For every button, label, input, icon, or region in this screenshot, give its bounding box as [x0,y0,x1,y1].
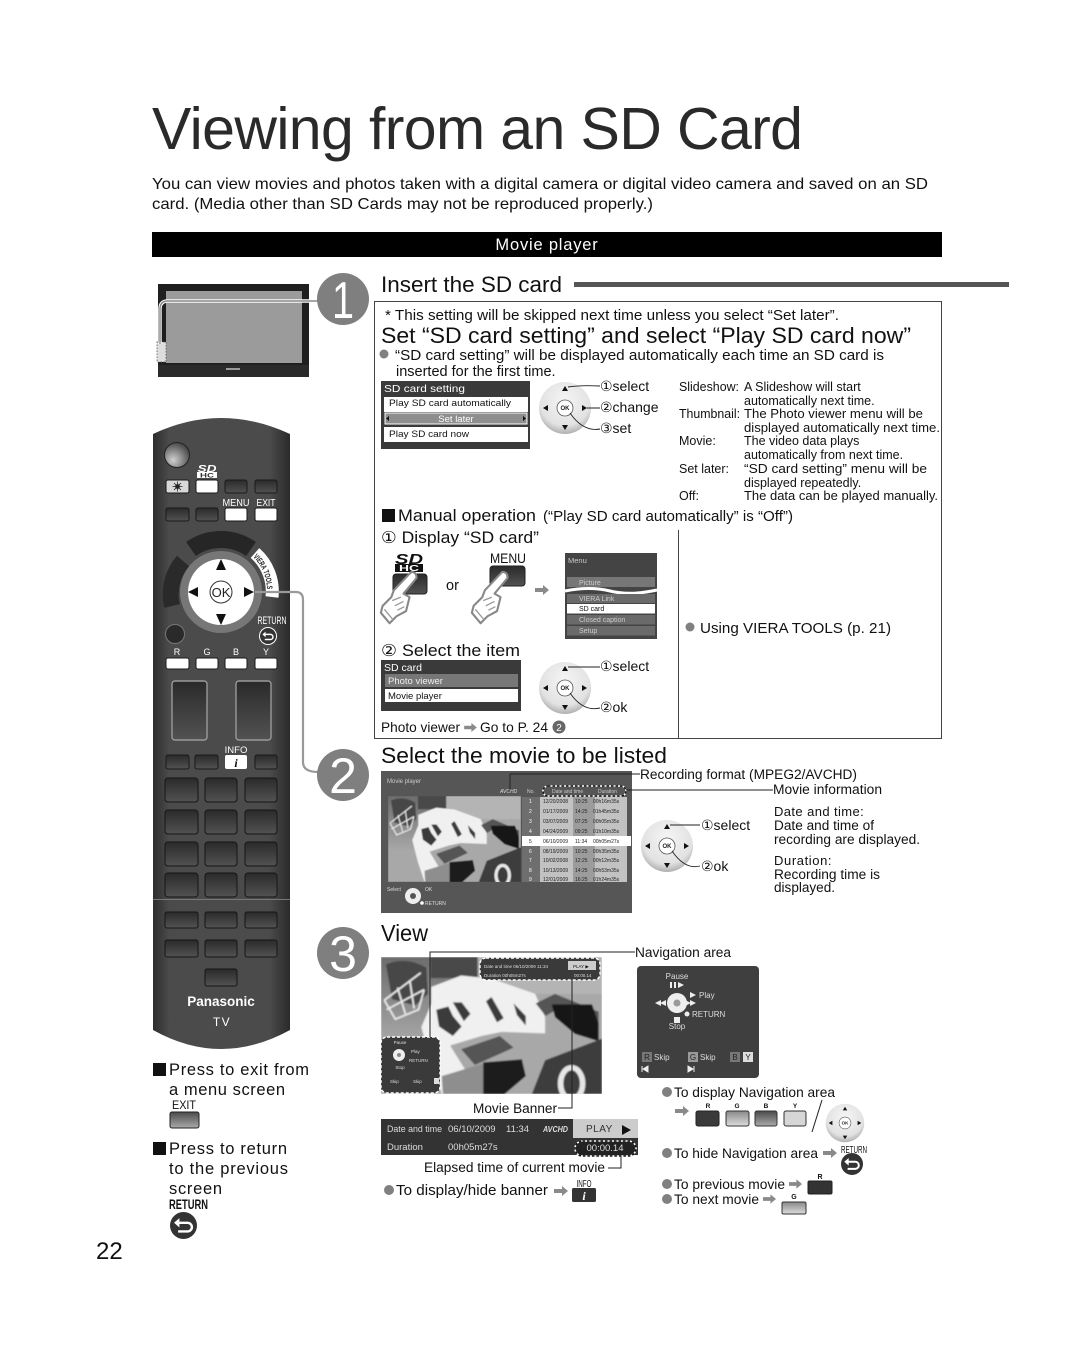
screen: SD card menu: SD card [384,662,422,674]
movie table: 03/07/2009 [543,819,568,825]
on-screen banner: Duration 00h05m27s [484,973,527,978]
movie table: 00h35m35s [593,849,620,855]
movie table: 01h10m35s [593,829,620,835]
callout: navigation area [430,945,731,1037]
colour keys [166,658,277,669]
note: next movie: G [791,1194,797,1201]
note: press to return: screen [169,1180,222,1198]
return button [258,615,287,645]
photo viewer reference [381,719,566,735]
on-screen navigation area: Skip [413,1079,422,1084]
note: display navigation area: To display Navigation area [674,1084,835,1100]
bullet text: “SD card setting” will be displayed automatically each time an SD card is [395,348,884,364]
screen: movie player list: AVCHD [499,789,518,795]
screen: SD card setting menu: Play SD card automatically [389,398,511,409]
exit key: EXIT [172,1098,197,1112]
screen: SD card setting menu [381,381,530,449]
callout line: step 1 grey core [160,301,320,344]
colour key labels: Y [263,647,269,657]
section header bar: Movie player [152,232,942,257]
number keys [165,778,277,897]
on-screen banner: PLAY ▶ [573,964,589,969]
screen: movie player list: Date and time [552,789,583,795]
step heading: select the item: ② Select the item [381,642,520,660]
movie table: 08/19/2009 [543,849,568,855]
lower keys [165,912,277,986]
movie table: 9 [529,877,532,883]
control pad with step labels [539,378,659,436]
movie table: 12:25 [575,858,588,864]
menu and exit labels [222,497,276,509]
on-screen banner: 00:00.14 [574,973,592,978]
panel: navigation area: Pause [666,972,689,981]
movie table: 6 [529,849,532,855]
callout line: step 1 to SD slot [160,301,320,344]
on-screen navigation area: Play [411,1049,421,1054]
info button [166,745,277,770]
exit key [170,1098,199,1128]
intro text [152,176,928,213]
manual operation heading: Manual operation [398,507,536,525]
screen: Menu: Setup [579,628,597,635]
control pad with select and ok labels [539,658,649,715]
subheading: Set “SD card setting” and select “Play SD card now” [381,323,911,348]
screen controls: OK [425,887,433,893]
callout: elapsed time: Elapsed time of current movie [424,1160,605,1175]
callout: movie banner: Movie Banner [473,1101,558,1116]
movie table: 07:25 [575,819,588,825]
SD logo on remote: HC [200,474,215,480]
movie table: 00h12m35s [593,858,620,864]
screen: movie player list: Duration [598,789,617,795]
bullet text: inserted for the first time. [396,364,556,380]
callout: movie banner [473,980,572,1116]
movie table: 01h45m35s [593,809,620,815]
movie table: 8 [529,868,532,874]
movie table: 3 [529,819,532,825]
colour key labels: R [174,647,181,657]
movie table: 4 [529,829,532,835]
movie table: 11:34 [575,839,587,845]
movie table: 00h16m35s [593,799,620,805]
panel: navigation area [637,966,759,1078]
control pad with select and ok labels: ①select [600,658,649,674]
movie info description: recording are displayed. [774,832,920,847]
note: press to exit: a menu screen [169,1081,285,1099]
manual operation heading: (“Play SD card automatically” is “Off”) [543,509,793,525]
movie table: 12/01/2009 [543,877,568,883]
screen: SD card setting menu: SD card setting [384,383,465,395]
control pad with step labels: ③set [600,420,631,436]
icon: MENU button with hand [472,550,526,623]
heading: view: View [381,920,428,946]
callout: movie information [543,782,882,797]
callout line: step 2 to navigation pad [255,592,318,772]
note: next movie [662,1191,806,1214]
movie table: 10:25 [575,799,588,805]
colour key labels: B [233,647,239,657]
mode descriptions: The data can be played manually. [744,489,938,503]
movie table: 00h05m35s [593,819,620,825]
screen: SD card setting menu: Set later [438,414,474,425]
panel: movie banner: 00:00.14 [587,1143,623,1154]
return key: RETURN [169,1197,208,1212]
movie table: 00h05m27s [593,839,620,845]
movie table: 16:25 [575,877,588,883]
photo viewer reference: 2 [556,723,562,734]
step badge 2: 2 [329,748,357,804]
note: press to return: Press to return [169,1140,287,1158]
note: previous movie [662,1174,832,1194]
screen: Menu [565,553,657,639]
note: display navigation area [662,1084,864,1142]
movie table: 10:25 [575,849,588,855]
note: press to exit: Press to exit from [169,1061,309,1079]
movie table: 00h53m35s [593,868,620,874]
SD logo on remote: SD [198,464,216,475]
screen: movie player list: No. [527,789,535,795]
movie info description: displayed. [774,880,835,895]
screen controls: RETURN [425,901,446,907]
on-screen banner: Date and time 06/10/2009 11:34 [484,964,548,969]
screen: Menu: Closed caption [579,617,625,624]
step badge 2 [317,748,369,804]
icon: SD button with hand: SD [395,551,423,568]
button row 2 [166,508,277,521]
screen: Menu: SD card [579,606,604,613]
note: display navigation area: R [706,1103,711,1110]
panel: movie banner: AVCHD [542,1125,568,1134]
panel: navigation area: Play [699,991,715,1000]
movie info description: Date and time: [774,804,864,819]
callout: navigation area: Navigation area [635,945,731,960]
mode descriptions [679,380,940,503]
panel: movie banner: 11:34 [506,1124,529,1135]
menu and exit labels: EXIT [256,497,276,509]
panel: navigation area: B [732,1053,738,1062]
heading rule [574,282,1009,287]
mode descriptions: automatically next time. [744,394,875,408]
remote control [153,418,290,1049]
on-screen navigation area: RETURN [409,1058,428,1063]
panel: navigation area: Skip [700,1053,716,1062]
intro text: card. (Media other than SD Cards may not be reproduced properly.) [152,196,653,213]
navigation ring [162,531,279,633]
photo viewer reference: Go to P. 24 [480,719,548,735]
panel: movie banner: PLAY [586,1124,613,1135]
control pad with select and ok labels [641,817,750,874]
screen: movie player list [381,771,632,913]
screen: playback view [381,957,602,1099]
power button [164,442,190,468]
note: display or hide banner [384,1179,596,1203]
control pad with step labels: ①select [600,378,649,394]
icon: MENU button with hand: MENU [490,550,526,566]
step badge 3 [317,926,369,982]
control pad with step labels: ②change [600,399,659,415]
note: hide navigation area [662,1144,867,1175]
control pad with select and ok labels: ②ok [701,858,729,874]
screen: Menu: Picture [579,580,601,587]
note: next movie: To next movie [674,1191,759,1207]
note: display navigation area: B [764,1103,769,1110]
mode descriptions: The video data plays [744,434,859,448]
movie info description: Recording time is [774,867,880,882]
movie table: 10/02/2008 [543,858,568,864]
panel: navigation area: R [644,1053,650,1062]
brand: Panasonic [187,994,255,1009]
on-screen navigation area: Pause [394,1040,407,1045]
SD logo on remote [197,464,217,480]
screen controls [387,887,446,907]
round button [166,624,184,644]
panel: navigation area: G [690,1053,696,1062]
colour key labels: G [203,647,211,657]
note: previous movie: R [817,1174,823,1181]
manual operation heading [382,507,793,525]
control pad with select and ok labels: ②ok [600,699,628,715]
step badge 3: 3 [329,926,357,982]
panel: SD card setting frame [374,302,942,738]
movie table: 2 [529,809,532,815]
menu and exit labels: MENU [222,497,250,509]
button row 1 [166,480,277,493]
photo viewer reference: Photo viewer [381,719,460,735]
mode descriptions: displayed repeatedly. [744,476,861,490]
mode descriptions: “SD card setting” menu will be [744,462,927,476]
panel: movie banner: Duration [387,1142,423,1153]
movie table: 1 [529,799,532,805]
arrow [535,585,549,595]
mode descriptions: automatically from next time. [744,448,903,462]
mode descriptions: A Slideshow will start [744,380,861,394]
mode descriptions: Slideshow: [679,380,739,394]
screen: movie player list: Movie player [387,779,421,785]
callout: movie information: Movie information [773,782,882,797]
note: display or hide banner: i [582,1189,586,1203]
icon: SD button with hand: HC [399,564,419,573]
note: hide navigation area: To hide Navigation area [674,1145,818,1161]
panel: movie banner: 06/10/2009 [448,1124,496,1135]
mode descriptions: The Photo viewer menu will be [744,407,923,421]
movie table: 09:25 [575,829,588,835]
screen: SD card menu [381,660,521,711]
navigation ring: OK [212,585,231,600]
section header bar: Movie player: Movie player [495,236,599,254]
TV label: TV [213,1015,231,1029]
movie table: 5 [529,839,532,845]
panel: navigation area: Skip [654,1053,670,1062]
mode descriptions: Off: [679,489,699,503]
note: * This setting will be skipped next time unless you select “Set later”. [385,308,839,324]
note: using VIERA TOOLS: Using VIERA TOOLS (p. 21) [700,621,891,637]
mode descriptions: Thumbnail: [679,407,740,421]
note: display or hide banner: INFO [576,1179,592,1190]
movie info description: Date and time of [774,818,874,833]
on-screen navigation area: Skip [390,1079,399,1084]
or: or [446,578,459,594]
panel: navigation area: Y [745,1053,751,1062]
on-screen banner [480,958,600,980]
movie info description: Duration: [774,853,832,868]
panel: navigation area: RETURN [692,1010,726,1019]
step badge 1 [317,272,369,330]
screen controls: Select [387,887,402,893]
panel: movie banner: 00h05m27s [448,1142,498,1153]
tall volume and channel keys [172,681,271,740]
step badge 1: 1 [332,272,354,330]
mode descriptions: Movie: [679,434,716,448]
note: display or hide banner: To display/hide banner [396,1183,548,1199]
screen: SD card setting menu: Play SD card now [389,429,469,440]
mode descriptions: Set later: [679,462,729,476]
on-screen navigation area [381,1037,440,1093]
control pad with select and ok labels: ①select [701,817,750,833]
page number: 22 [96,1238,123,1265]
note: previous movie: To previous movie [674,1176,785,1192]
screen: SD card menu: Movie player [388,691,442,702]
note: display navigation area: Y [793,1103,798,1110]
note: press to return [153,1140,288,1239]
intro text: You can view movies and photos taken with a digital camera or digital video camera and saved on an SD [152,176,928,193]
heading: select the movie: Select the movie to be listed [381,743,667,768]
return button: RETURN [258,615,287,627]
info button: i [234,756,238,770]
movie table [522,797,631,883]
colour key labels [174,647,269,657]
screen: SD card menu: Photo viewer [388,676,443,687]
movie table: 10/13/2009 [543,868,568,874]
movie table: 14:25 [575,868,588,874]
movie table: 7 [529,858,532,864]
note: hide navigation area: RETURN [841,1144,867,1156]
info button: INFO [225,745,247,756]
photo thumbnail [388,796,521,882]
movie table: 14:25 [575,809,588,815]
callout: recording format: Recording format (MPEG2/AVCHD) [640,767,857,782]
column divider [678,530,679,738]
icon: SD button with hand [381,551,427,623]
note: press to return: to the previous [169,1160,288,1178]
movie table: 04/24/2009 [543,829,568,835]
note: press to exit [153,1061,309,1128]
panel: movie banner [381,1119,638,1156]
movie table: 01/17/2009 [543,809,568,815]
mode descriptions: displayed automatically next time. [744,421,940,435]
movie table: 12/20/2008 [543,799,568,805]
movie table: 01h24m35s [593,877,620,883]
heading: insert the SD card: Insert the SD card [381,272,562,297]
panel: navigation area: Stop [669,1022,686,1031]
bullet text [380,348,884,380]
movie table: 06/10/2009 [543,839,568,845]
title: Viewing from an SD Card [152,96,803,162]
on-screen navigation area: Stop [395,1065,405,1070]
step heading: display SD card: ① Display “SD card” [381,529,539,547]
navigation ring: VIERA TOOLS [254,553,273,589]
panel: movie banner: Date and time [387,1124,442,1135]
note: display navigation area: G [734,1103,740,1110]
screen: Menu: Menu [568,556,587,565]
callout: recording format [510,767,857,790]
movie info description [774,804,920,895]
screen: Menu: VIERA Link [579,596,615,603]
illustration: TV with SD slot [157,284,309,377]
